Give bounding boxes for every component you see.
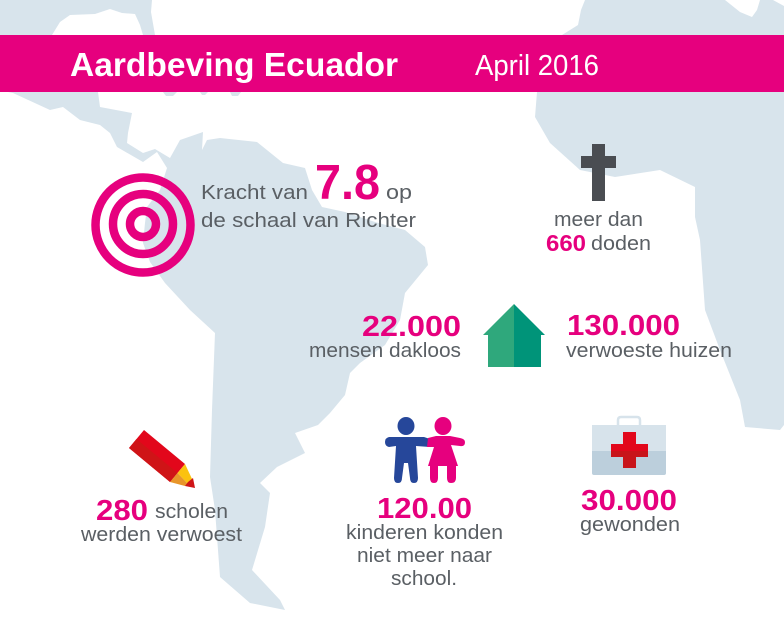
magnitude text: op [386, 182, 412, 204]
deaths text: doden [591, 233, 651, 255]
schools text [80, 495, 242, 546]
destroyed houses text: 130.000 [567, 310, 680, 342]
homeless text: 22.000 [362, 311, 461, 343]
magnitude text: 7.8 [315, 156, 380, 210]
icon: target [96, 178, 190, 272]
top banner [0, 35, 784, 92]
title: Aardbeving Ecuador [70, 46, 398, 83]
icon: children [385, 417, 465, 483]
children text: kinderen konden [346, 522, 503, 544]
icon: house [483, 304, 545, 367]
children text [346, 493, 503, 590]
children text: 120.00 [377, 493, 472, 525]
magnitude text: de schaal van Richter [201, 210, 416, 232]
magnitude text [201, 156, 416, 232]
children text: school. [391, 568, 457, 590]
injured text: 30.000 [581, 485, 677, 517]
children text: niet meer naar [357, 545, 492, 567]
injured text: gewonden [580, 514, 680, 536]
icon: first aid kit [592, 417, 666, 475]
destroyed houses text [566, 310, 732, 362]
magnitude text: Kracht van [201, 182, 308, 204]
homeless text: mensen dakloos [309, 340, 461, 362]
schools text: werden verwoest [80, 524, 242, 546]
destroyed houses text: verwoeste huizen [566, 340, 732, 362]
icon: pencil [129, 430, 195, 488]
injured text [580, 485, 680, 536]
homeless text [309, 311, 461, 362]
schools text: 280 [96, 495, 148, 527]
date: April 2016 [475, 50, 599, 82]
deaths text: 660 [546, 230, 586, 256]
schools text: scholen [155, 501, 228, 523]
deaths text [546, 209, 651, 256]
icon: cross [581, 144, 616, 201]
deaths text: meer dan [554, 209, 643, 231]
